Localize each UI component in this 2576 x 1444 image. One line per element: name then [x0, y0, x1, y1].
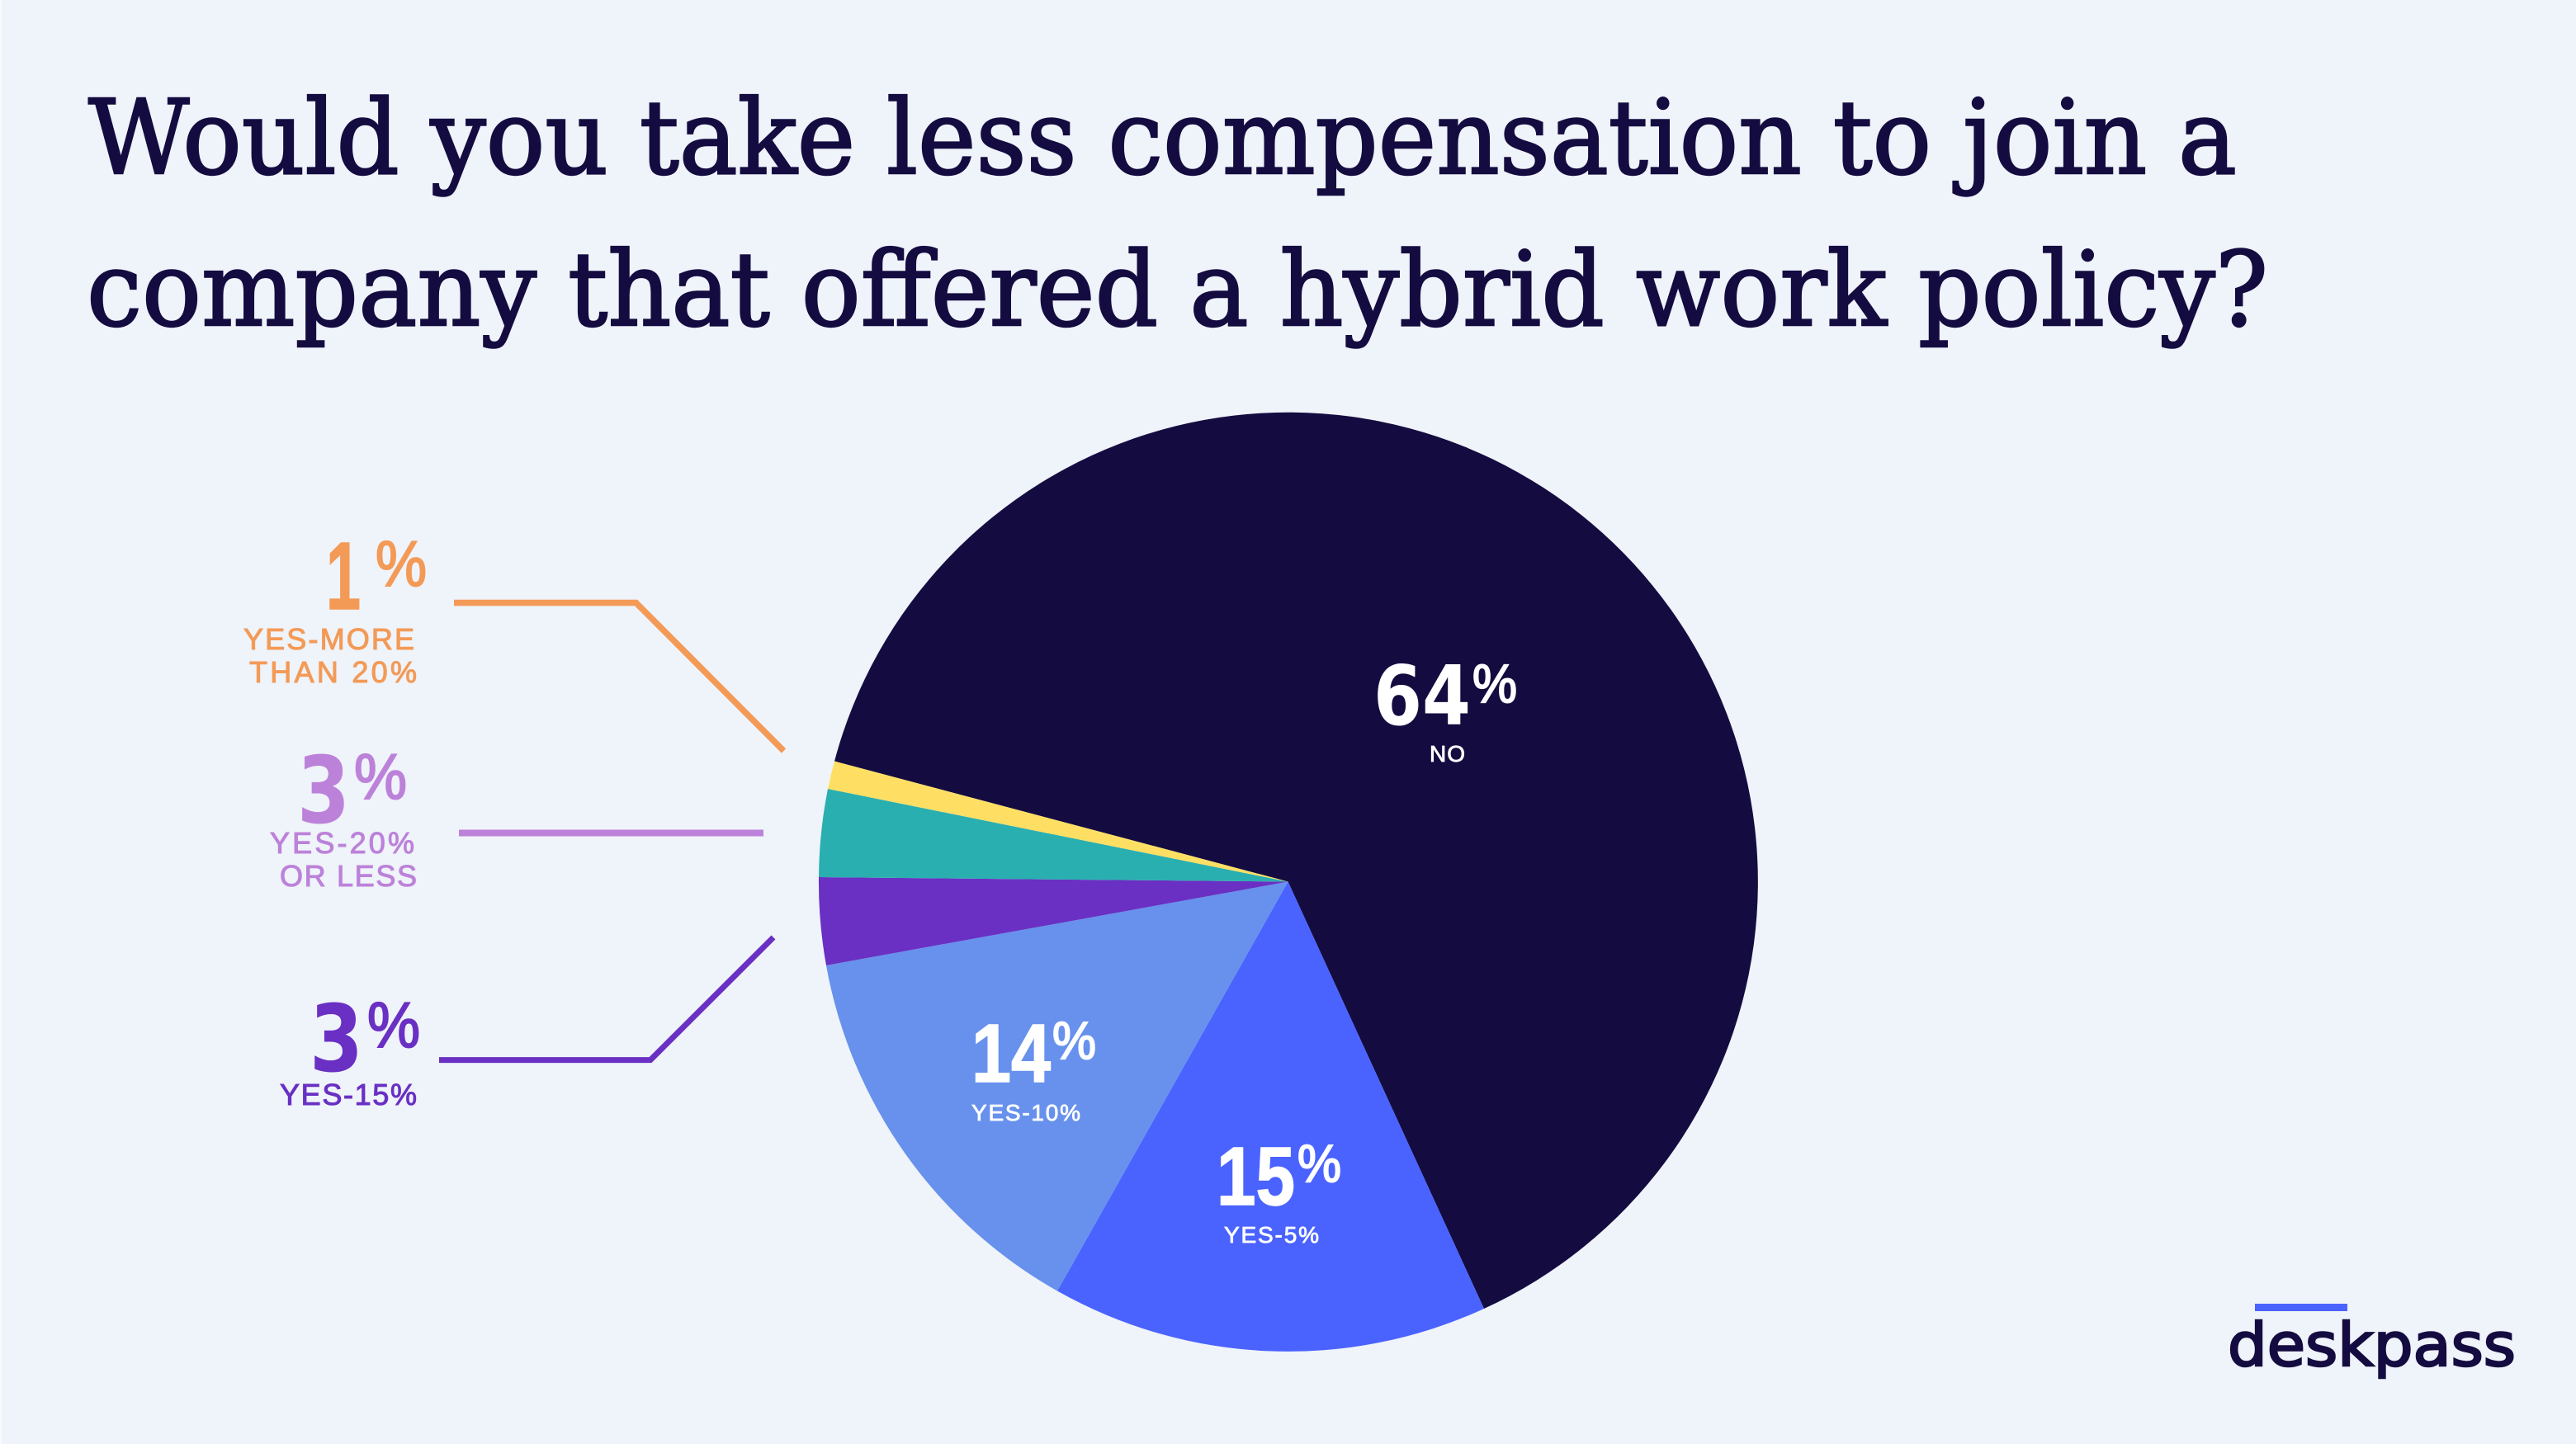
slice: Yes 20% or less 3% — [819, 789, 1288, 881]
callout: 3% Yes-15%: % — [367, 989, 420, 1061]
callout: 3% Yes-20% or less: 3 — [297, 738, 350, 845]
callout: 3% Yes-20% or less: OR LESS — [280, 859, 417, 893]
callout: 3% Yes-20% or less — [270, 738, 417, 893]
callout: 3% Yes-20% or less: YES-20% — [270, 826, 414, 860]
label: 64% No: NO — [1430, 741, 1465, 767]
label: 15% Yes-5% — [1217, 1130, 1341, 1248]
label: 64% No: % — [1472, 653, 1517, 714]
label: 15% Yes-5%: 15 — [1217, 1130, 1295, 1223]
callout: 3% Yes-20% or less: % — [354, 740, 407, 813]
callout: 1% Yes-more than 20% — [243, 522, 427, 689]
pie chart — [819, 413, 1758, 1352]
slice: Yes more than 20% 1% — [828, 761, 1288, 881]
callout: 1% Yes-more than 20%: % — [376, 527, 427, 600]
slice: Yes 15% 3% — [819, 877, 1288, 965]
label: 14% Yes-10%: 14 — [971, 1007, 1051, 1100]
callout: 3% Yes-15%: YES-15% — [280, 1078, 417, 1111]
label: 14% Yes-10%: % — [1052, 1011, 1096, 1070]
callout: 1% Yes-more than 20%: THAN 20% — [249, 655, 417, 689]
callout: 1% Yes-more than 20%: YES-MORE — [243, 622, 414, 656]
callout: 3% Yes-15% — [280, 986, 420, 1111]
leader line: orange — [454, 602, 784, 751]
slice: Yes 10% 14% — [826, 881, 1288, 1291]
title: Would you take less compensation to join a — [88, 78, 2237, 198]
label: 14% Yes-10% — [971, 1007, 1096, 1125]
callout: 1% Yes-more than 20%: 1 — [326, 522, 361, 630]
label: 64% No: 64 — [1373, 648, 1471, 744]
logo: deskpass: deskpass — [2228, 1310, 2516, 1380]
label: 15% Yes-5%: % — [1297, 1134, 1341, 1193]
slice: No 64% — [834, 413, 1758, 1309]
callout: 3% Yes-15%: 3 — [310, 986, 363, 1093]
leader line: lilac — [459, 830, 763, 837]
label: 64% No — [1373, 648, 1517, 767]
title: company that offered a hybrid work policy? — [87, 230, 2268, 350]
leader line: purple — [439, 937, 773, 1060]
label: 15% Yes-5%: YES-5% — [1224, 1222, 1319, 1248]
title — [87, 78, 2268, 350]
slice: Yes 5% 15% — [1057, 881, 1484, 1352]
label: 14% Yes-10%: YES-10% — [971, 1100, 1080, 1125]
